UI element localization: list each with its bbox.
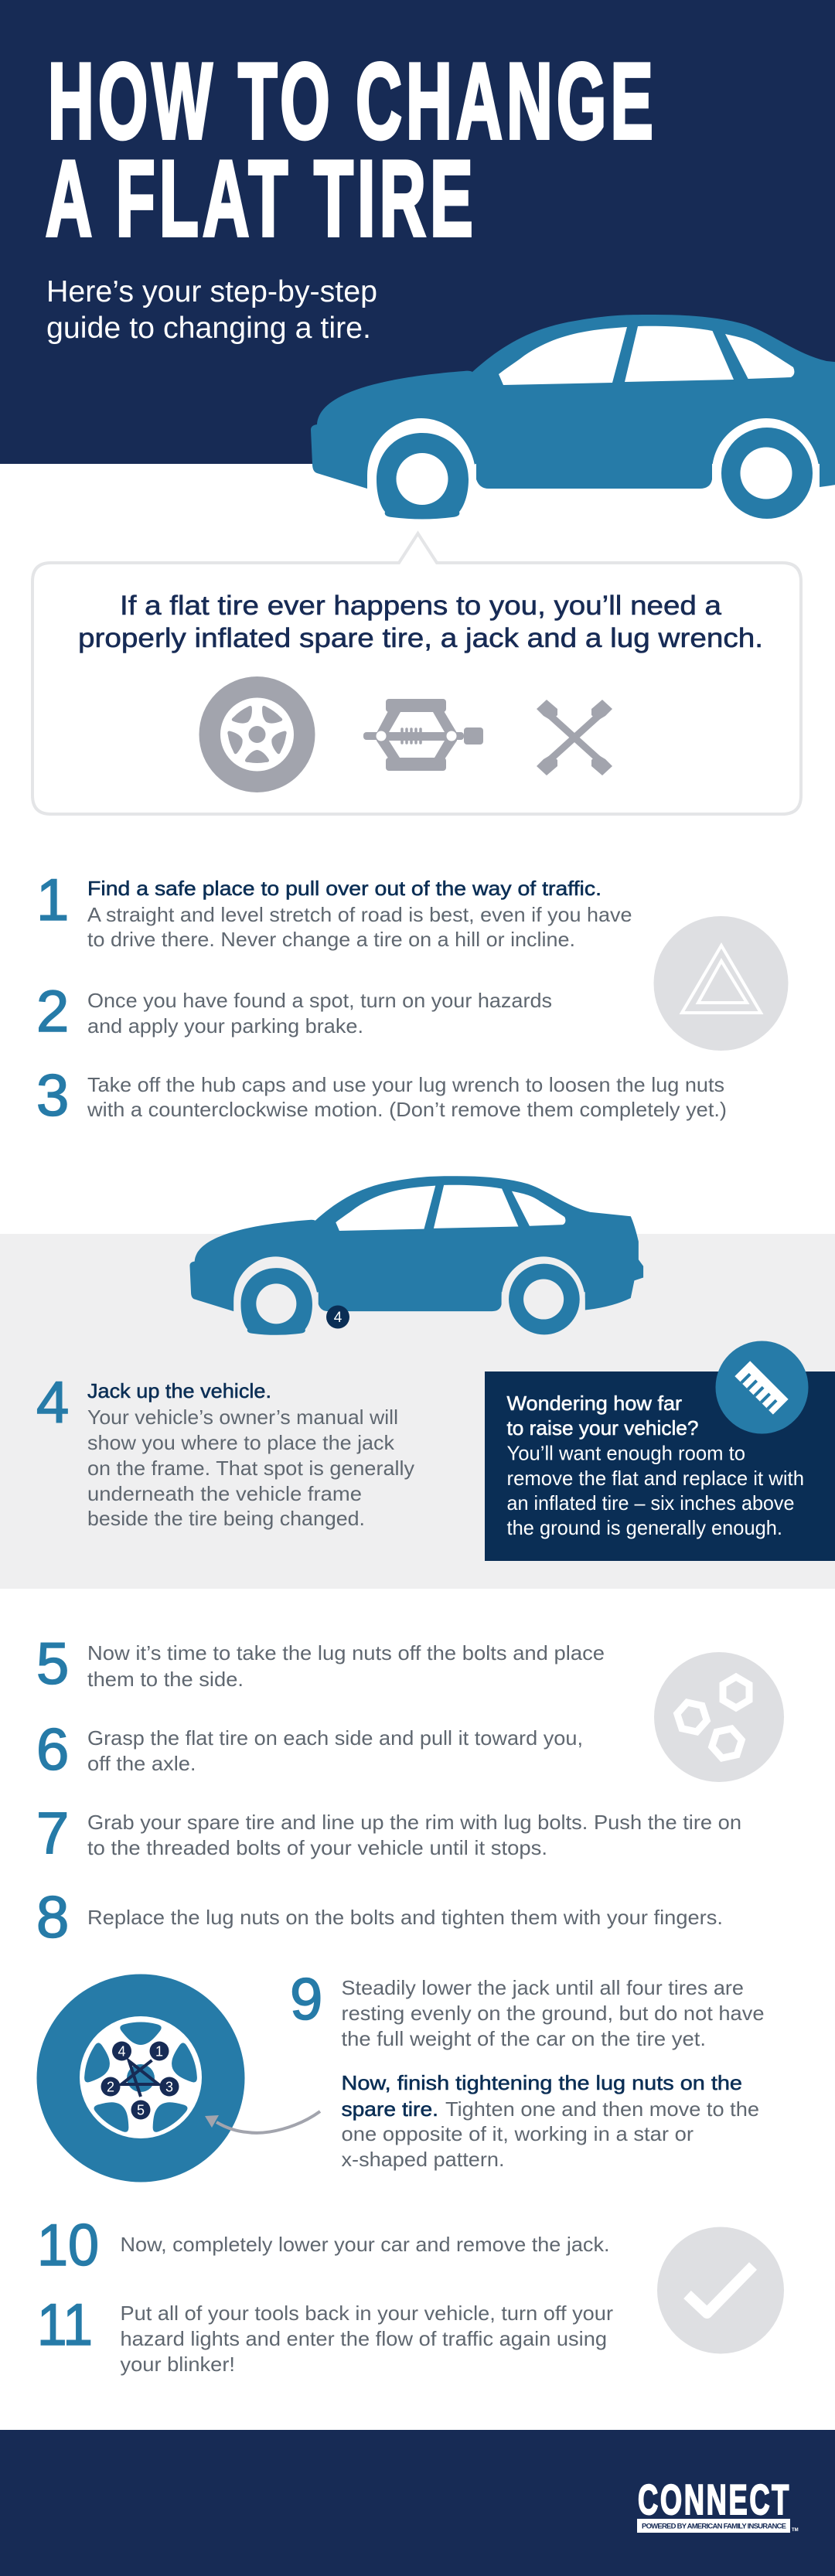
step 9: spare tire. xyxy=(342,2097,438,2121)
step 6: off the axle. xyxy=(87,1752,196,1775)
lug nut numbers: 1 xyxy=(155,2044,163,2060)
icon: spare tire xyxy=(199,676,315,792)
step 7: 7 xyxy=(36,1801,69,1866)
step 1: Find a safe place to pull over out of the way of traffic. xyxy=(87,877,602,900)
step 4: underneath the vehicle frame xyxy=(87,1482,362,1505)
step 10: 10 xyxy=(37,2213,99,2278)
step 2: 2 xyxy=(36,979,69,1044)
panel text: Wondering how far xyxy=(507,1392,682,1415)
step 4 xyxy=(36,1370,414,1530)
panel text: remove the flat and replace it with xyxy=(507,1467,804,1490)
step 1: A straight and level stretch of road is best, even if you have xyxy=(87,903,632,926)
callout text xyxy=(78,591,763,653)
step 9: one opposite of it, working in a star or xyxy=(342,2122,694,2145)
step 10: Now, completely lower your car and remove the jack. xyxy=(121,2233,609,2256)
header background xyxy=(0,0,835,464)
lug nut numbers: 2 xyxy=(107,2080,114,2095)
panel: what you need callout xyxy=(32,533,801,814)
step 10 xyxy=(37,2213,609,2278)
icon: lug nuts xyxy=(654,1652,784,1782)
panel text: the ground is generally enough. xyxy=(507,1516,782,1539)
panel text xyxy=(507,1392,804,1539)
step 9: the full weight of the car on the tire yet. xyxy=(342,2027,706,2050)
car with flat tire xyxy=(311,315,835,520)
step 2: and apply your parking brake. xyxy=(87,1014,363,1038)
step 9: Now, finish tightening the lug nuts on the xyxy=(342,2071,742,2094)
lug nut numbers: 5 xyxy=(137,2103,145,2118)
step 1: to drive there. Never change a tire on a hill or incline. xyxy=(87,928,575,951)
title: A FLAT TIRE xyxy=(46,139,477,258)
icon: jack xyxy=(363,699,483,771)
panel text: an inflated tire – six inches above xyxy=(507,1491,795,1515)
step 4: beside the tire being changed. xyxy=(87,1507,365,1530)
step 5: 5 xyxy=(36,1631,69,1697)
step 6 xyxy=(36,1717,583,1783)
step 11 xyxy=(37,2292,613,2376)
step 4: show you where to place the jack xyxy=(87,1431,395,1454)
step 1 xyxy=(36,867,632,951)
step 2: Once you have found a spot, turn on your hazards xyxy=(87,989,552,1012)
step 11: 11 xyxy=(37,2292,93,2358)
logo: Connect: POWERED BY AMERICAN FAMILY INSURANCE xyxy=(642,2522,786,2531)
jack point badge xyxy=(326,1305,349,1328)
grey band xyxy=(0,1234,835,1589)
step 4: 4 xyxy=(36,1370,69,1436)
jack point badge: 4 xyxy=(334,1310,343,1326)
step 4: on the frame. That spot is generally xyxy=(87,1457,414,1480)
icon: check mark xyxy=(657,2227,784,2353)
callout text: If a flat tire ever happens to you, you’ll need a xyxy=(120,591,722,621)
step 4: Your vehicle’s owner’s manual will xyxy=(87,1406,398,1429)
step 9: resting evenly on the ground, but do not have xyxy=(342,2002,764,2025)
step 9 xyxy=(290,1967,764,2171)
lug nut numbers: 4 xyxy=(118,2044,126,2060)
lug nut numbers xyxy=(101,2041,179,2120)
step 9: Tighten one and then move to the xyxy=(445,2097,759,2121)
panel text: to raise your vehicle? xyxy=(507,1416,699,1440)
step 6: 6 xyxy=(36,1717,69,1783)
step 2 xyxy=(36,979,552,1044)
logo: Connect: TM xyxy=(792,2528,799,2533)
step 7: Grab your spare tire and line up the rim with lug bolts. Push the tire on xyxy=(87,1811,741,1834)
tire tightening diagram xyxy=(37,1975,244,2182)
panel text: You’ll want enough room to xyxy=(507,1441,745,1464)
step 5: them to the side. xyxy=(87,1668,244,1691)
icon: lug wrench xyxy=(537,700,612,775)
step 8: 8 xyxy=(36,1885,69,1951)
subtitle: guide to changing a tire. xyxy=(46,312,371,345)
step 9: 9 xyxy=(290,1967,322,2033)
step 1: 1 xyxy=(36,867,69,933)
step 3: Take off the hub caps and use your lug wrench to loosen the lug nuts xyxy=(87,1073,724,1096)
step 3 xyxy=(36,1063,727,1129)
step 6: Grasp the flat tire on each side and pull it toward you, xyxy=(87,1726,583,1750)
step 8: Replace the lug nuts on the bolts and tighten them with your fingers. xyxy=(87,1906,723,1929)
step 11: your blinker! xyxy=(121,2353,235,2376)
panel: how far to raise xyxy=(485,1341,835,1561)
step 5: Now it’s time to take the lug nuts off the bolts and place xyxy=(87,1641,605,1665)
icon: hazard triangle xyxy=(654,916,789,1051)
step 3: 3 xyxy=(36,1063,69,1129)
subtitle: Here’s your step-by-step xyxy=(46,275,377,308)
callout text: properly inflated spare tire, a jack and a lug wrench. xyxy=(78,623,763,653)
footer band xyxy=(0,2430,835,2576)
step 3: with a counterclockwise motion. (Don’t remove them completely yet.) xyxy=(87,1098,727,1121)
step 5 xyxy=(36,1631,605,1697)
icon: ruler xyxy=(716,1341,809,1433)
title xyxy=(46,42,657,258)
step 9: x-shaped pattern. xyxy=(342,2148,504,2171)
step 11: Put all of your tools back in your vehicle, turn off your xyxy=(121,2302,613,2325)
step 4: Jack up the vehicle. xyxy=(87,1379,271,1402)
step 7 xyxy=(36,1801,741,1866)
step 9: Steadily lower the jack until all four tires are xyxy=(342,1976,744,1999)
step 8 xyxy=(36,1885,723,1951)
step 11: hazard lights and enter the flow of traffic again using xyxy=(121,2327,607,2350)
step 7: to the threaded bolts of your vehicle until it stops. xyxy=(87,1836,547,1859)
subtitle xyxy=(46,275,377,345)
lug nut numbers: 3 xyxy=(165,2080,173,2095)
car with jack point marker xyxy=(189,1176,643,1335)
arrow xyxy=(205,2111,320,2133)
